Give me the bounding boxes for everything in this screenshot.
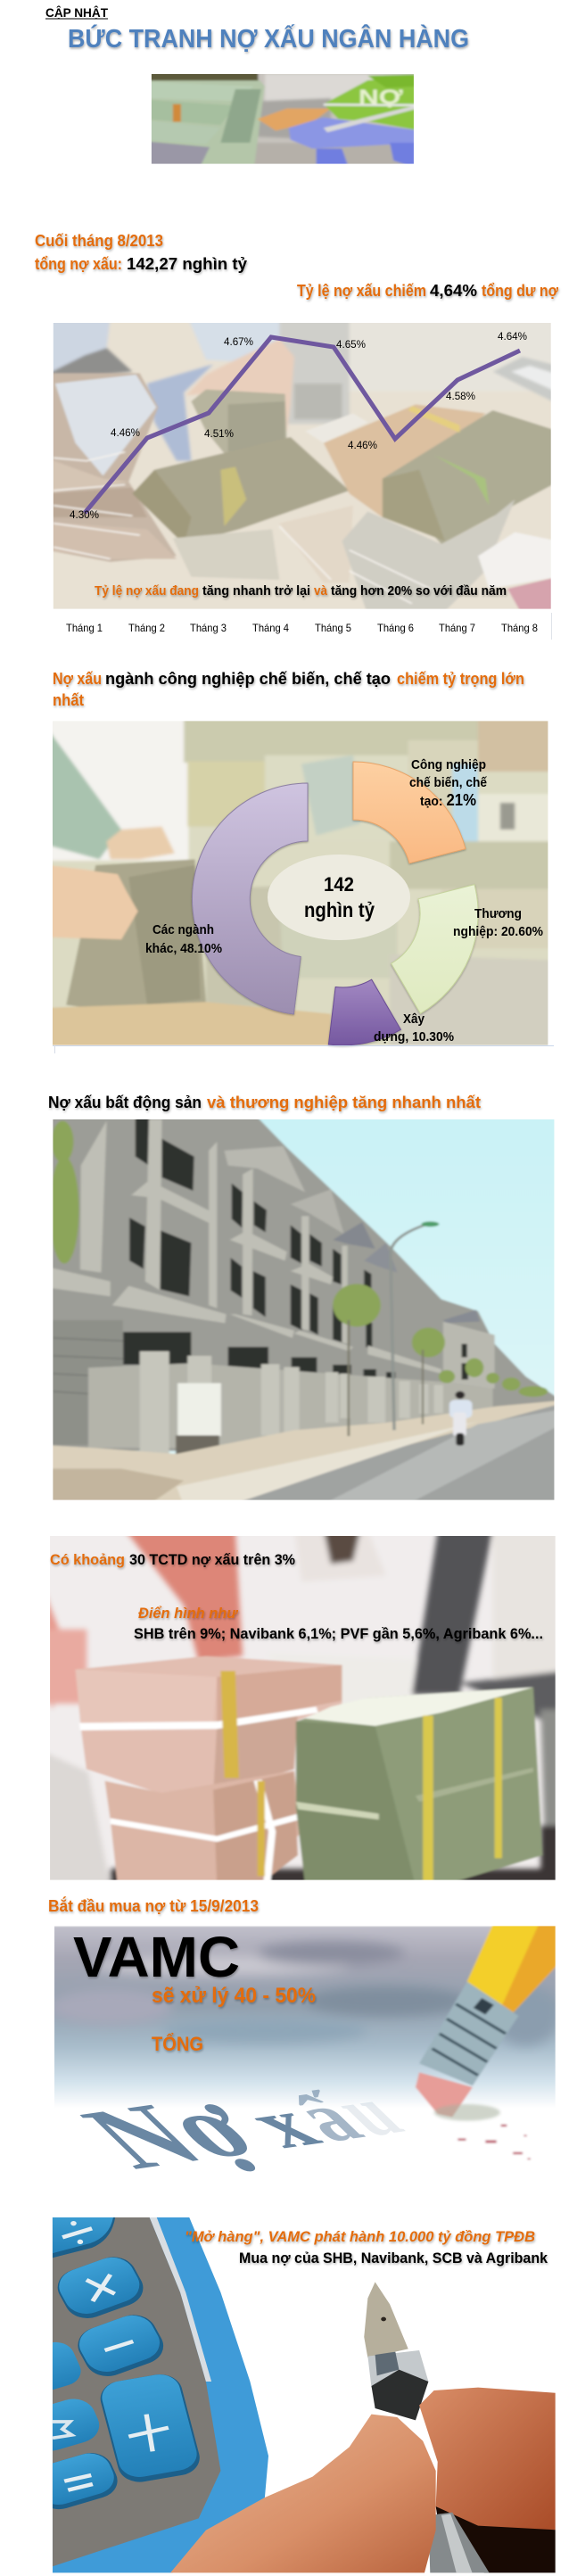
- heading: manufacturing share: ngành công nghiệp chế biến, chế tạo: [105, 670, 391, 688]
- callout: example banks: Điển hình như: [138, 1605, 239, 1622]
- label: Thương nghiệp 20.60%: Thương: [474, 906, 522, 921]
- pencil: [466, 1926, 540, 2005]
- chart caption: và: [314, 583, 328, 599]
- hand: thumb: [166, 2415, 436, 2576]
- month axis labels: [66, 613, 552, 640]
- trees and lamp post: [50, 1121, 548, 1397]
- label: Công nghiệp chế biến, chế tạo 21%: chế biến, chế: [409, 775, 488, 790]
- heading: 30 credit institutions: 30 TCTD nợ xấu trên 3%: [129, 1551, 295, 1568]
- VAMC label: VAMC: [73, 1925, 240, 1989]
- partly erased words: x: [226, 2086, 340, 2163]
- hand: index finger: [419, 2388, 563, 2531]
- calculator keys: [15, 2211, 203, 2514]
- callout: VAMC bond issue: [185, 2228, 548, 2266]
- label: Xây dựng 10.30%: Xây: [403, 1011, 425, 1027]
- chart caption: tăng hơn 20% so với đầu năm: [331, 583, 507, 599]
- heading: manufacturing share: Nợ xấu: [53, 670, 102, 688]
- windows: [123, 1113, 468, 1383]
- banner image: money and man carrying debt sack: NỢ: [359, 85, 403, 109]
- donut centre: nghìn tỷ: [304, 898, 375, 921]
- label: Công nghiệp chế biến, chế tạo 21%: tạo: 21%: [420, 791, 476, 809]
- photo: unfinished townhouses: [45, 1113, 562, 1506]
- data labels: 4.64%: [498, 330, 527, 343]
- callout: VAMC bond issue: "Mở hàng", VAMC phát hành 10.000 tỷ đồng TPĐB: [185, 2228, 535, 2245]
- photo: pencil erasing bad debt: [54, 1926, 556, 2171]
- ground: [45, 1400, 562, 1506]
- callout: VAMC bond issue: Mua nợ của SHB, Navibank, SCB và Agribank: [239, 2250, 548, 2266]
- VAMC handling share: [152, 1984, 316, 2055]
- summary: total bad debt: tổng nợ xấu:: [35, 255, 122, 273]
- data labels: 4.30%: [70, 508, 99, 521]
- data labels: 4.58%: [446, 390, 475, 402]
- calculator body: [45, 2211, 268, 2576]
- summary: ratio of bad debt: [297, 281, 558, 300]
- month axis labels: Tháng 3: [190, 622, 227, 634]
- segment: Công nghiệp chế biến: [353, 762, 466, 863]
- month axis labels: Tháng 2: [128, 622, 165, 634]
- label: Các ngành khác 48.10%: khác, 48.10%: [145, 941, 222, 956]
- heading: manufacturing share: chiếm tỷ trọng lớn: [397, 670, 524, 688]
- green bundles: [296, 1688, 542, 1886]
- title: BỨC TRANH NỢ XẤU NGÂN HÀNG: [68, 23, 469, 54]
- month axis labels: Tháng 7: [439, 622, 475, 634]
- summary: ratio of bad debt: 4,64%: [430, 281, 477, 300]
- line chart panel: bad debt ratio by month: [46, 317, 558, 640]
- heading: 30 credit institutions: Có khoảng: [50, 1551, 125, 1568]
- banner image: money and man carrying debt sack: [152, 74, 414, 164]
- pink bundles: [76, 1656, 342, 1793]
- label: Thương nghiệp 20.60%: nghiệp: 20.60%: [453, 924, 543, 939]
- chart background photo: stacks of banknotes: [46, 317, 558, 615]
- month axis labels: Tháng 8: [501, 622, 538, 634]
- label: Các ngành khác 48.10%: [145, 922, 222, 956]
- label: Công nghiệp chế biến, chế tạo 21%: Công nghiệp: [411, 757, 486, 772]
- summary: total bad debt: 142,27 nghìn tỷ: [127, 254, 248, 273]
- label: Công nghiệp chế biến, chế tạo 21%: [409, 757, 488, 809]
- donut background photo: hands counting money: [45, 715, 556, 1051]
- label: Xây dựng 10.30%: dựng, 10.30%: [374, 1029, 454, 1044]
- summary: ratio of bad debt: Tỷ lệ nợ xấu chiếm: [297, 282, 426, 300]
- purple trend line: [85, 337, 520, 513]
- label: Xây dựng 10.30%: [374, 1011, 454, 1044]
- chart caption: tăng nhanh trở lại: [202, 583, 310, 599]
- dark space below fingers: [436, 2506, 563, 2576]
- eraser crumbs: [457, 2125, 531, 2159]
- heading: real estate and trade: và thương nghiệp tăng nhanh nhất: [207, 1094, 481, 1111]
- callout: example banks: SHB trên 9%; Navibank 6,1%; PVF gần 5,6%, Agribank 6%...: [134, 1625, 543, 1642]
- chart caption: Tỷ lệ nợ xấu đang: [95, 583, 199, 599]
- donut chart panel: bad debt by sector: [45, 715, 556, 1053]
- donut centre: [268, 855, 410, 940]
- segment: Các ngành khác: [192, 783, 308, 1014]
- motorbike rider: [449, 1399, 472, 1418]
- pen barrel: [430, 2512, 489, 2572]
- callout: example banks: [134, 1605, 543, 1642]
- data labels: 4.65%: [336, 338, 366, 351]
- partly erased words: u: [312, 2075, 423, 2151]
- fence wall: [88, 1363, 493, 1448]
- segment: Thương nghiệp: [392, 885, 478, 1013]
- partly erased words: [58, 2057, 426, 2187]
- heading: real estate and trade: [48, 1094, 481, 1111]
- concrete balconies: [45, 1119, 441, 1374]
- partly erased words: ấ: [271, 2080, 383, 2156]
- partly erased words: Nợ: [58, 2077, 284, 2187]
- heading: debt purchase start date: Bắt đầu mua nợ từ 15/9/2013: [48, 1896, 259, 1915]
- label: Các ngành khác 48.10%: Các ngành: [152, 922, 214, 937]
- heading: real estate and trade: Nợ xấu bất động sản: [48, 1094, 202, 1111]
- summary: ratio of bad debt: tổng dư nợ: [482, 282, 558, 300]
- summary: total bad debt: Cuối tháng 8/2013: [35, 232, 163, 250]
- month axis labels: Tháng 6: [377, 622, 414, 634]
- data labels: 4.51%: [204, 427, 234, 440]
- pen nib: [364, 2282, 408, 2357]
- segment: Xây dựng: [328, 979, 400, 1045]
- heading: manufacturing share: nhất: [53, 691, 84, 709]
- donut centre: 142: [324, 873, 354, 896]
- month axis labels: Tháng 4: [252, 622, 289, 634]
- photo: calculator and pen: [52, 2217, 556, 2572]
- month axis labels: Tháng 1: [66, 622, 103, 634]
- month axis labels: Tháng 5: [315, 622, 351, 634]
- data labels: 4.46%: [111, 426, 140, 439]
- VAMC handling share: sẽ xử lý 40 - 50%: [152, 1984, 316, 2008]
- data labels: [70, 330, 527, 521]
- heading: 30 credit institutions: [50, 1551, 295, 1568]
- VAMC handling share: TỔNG: [152, 2033, 203, 2055]
- heading: manufacturing share: [53, 670, 524, 709]
- kicker: Cập nhật: CẬP NHẬT: [45, 4, 108, 20]
- photo: bundles of banknotes: [43, 1530, 563, 1886]
- chart caption: [95, 583, 507, 599]
- label: Thương nghiệp 20.60%: [453, 906, 543, 939]
- data labels: 4.67%: [224, 335, 253, 348]
- data labels: 4.46%: [348, 439, 377, 451]
- summary: total bad debt: [35, 232, 248, 273]
